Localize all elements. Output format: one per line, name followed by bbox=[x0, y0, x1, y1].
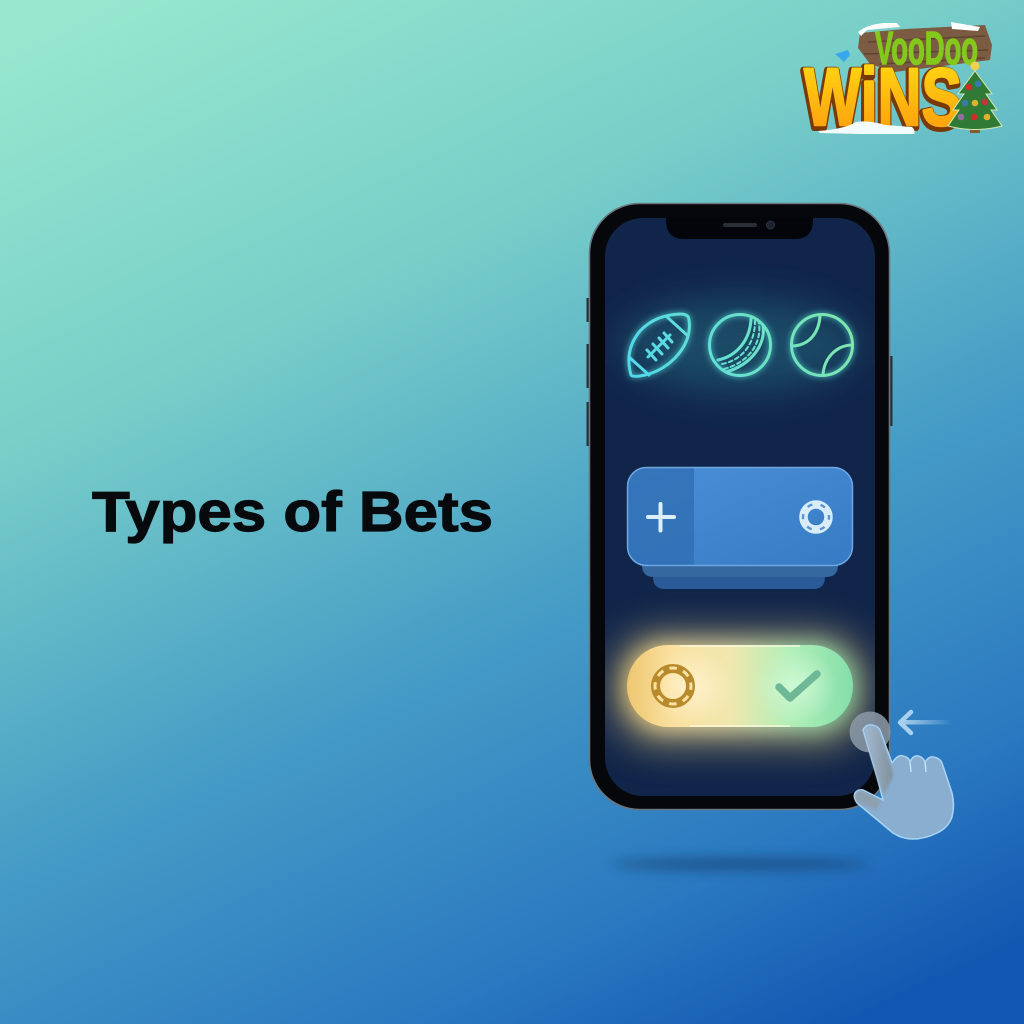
thumb shade bbox=[855, 791, 882, 810]
toggle body bbox=[627, 645, 853, 727]
phone side buttons bbox=[586, 298, 892, 446]
speaker bbox=[723, 223, 757, 227]
icon: plus bbox=[648, 504, 674, 530]
title: Types of Bets bbox=[92, 480, 493, 544]
sports icons row bbox=[629, 314, 852, 376]
toggle outer glow bbox=[624, 642, 856, 732]
logo: VooDoo Wins bbox=[803, 22, 1002, 145]
logo snow bbox=[818, 121, 915, 134]
phone screen bbox=[605, 218, 875, 796]
phone bbox=[586, 204, 892, 810]
icon: chip bbox=[803, 504, 829, 530]
bet amount card bbox=[627, 467, 853, 589]
swipe arrow bbox=[900, 712, 952, 733]
icons glow bbox=[629, 314, 852, 376]
icon: check mark bbox=[779, 674, 817, 698]
icon: cricket ball bbox=[710, 314, 770, 376]
icon: tennis ball bbox=[792, 314, 852, 376]
confirm toggle bbox=[624, 642, 856, 732]
card upper tray bbox=[642, 565, 838, 577]
phone body bbox=[590, 204, 890, 810]
logo WiNS wordmark: WiNS bbox=[803, 54, 961, 145]
card body bbox=[627, 467, 853, 566]
card left section bbox=[627, 467, 694, 566]
icon: gold chip bbox=[655, 668, 691, 704]
card lower tray bbox=[653, 577, 825, 589]
logo wooden sign bbox=[858, 22, 992, 72]
camera bbox=[766, 221, 774, 229]
notch bbox=[666, 217, 813, 239]
hand bbox=[854, 725, 954, 839]
logo christmas tree bbox=[948, 62, 1002, 133]
screen glow bbox=[610, 299, 870, 748]
pointing hand bbox=[850, 712, 954, 839]
touch circle bbox=[850, 712, 890, 752]
phone ground shadow bbox=[612, 858, 868, 870]
index finger shade bbox=[864, 726, 893, 796]
logo WiNS wordmark: WiNS bbox=[804, 52, 962, 143]
logo gem bbox=[835, 50, 850, 62]
icon: american football bbox=[629, 314, 689, 376]
